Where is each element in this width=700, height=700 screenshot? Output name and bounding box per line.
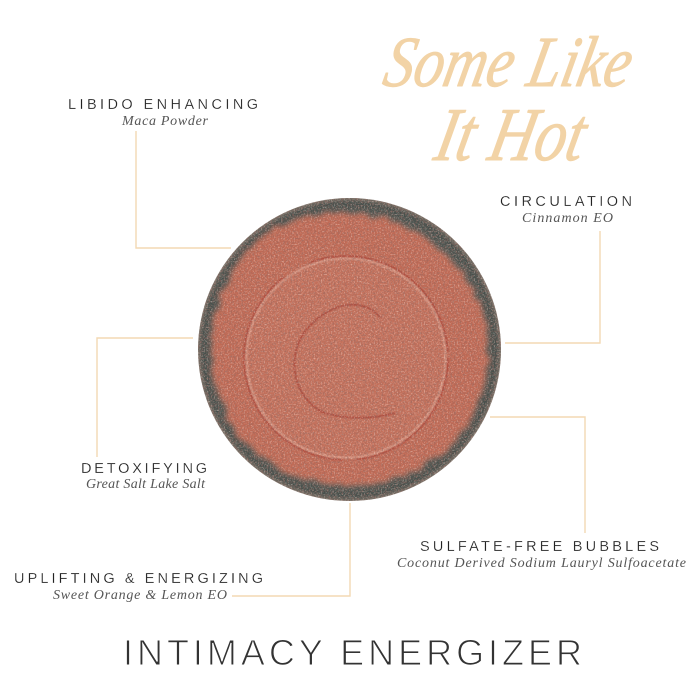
label: detoxifying: DETOXIFYING bbox=[81, 461, 207, 477]
label: detoxifying: Great Salt Lake Salt bbox=[86, 477, 206, 492]
title: Some Like It Hot: Some Like bbox=[378, 22, 641, 102]
connector: detoxifying bbox=[97, 338, 193, 457]
label: circulation bbox=[500, 194, 632, 226]
bath bomb salmon body bbox=[212, 213, 488, 486]
inner disc pale edge bbox=[246, 258, 446, 458]
title: Some Like It Hot: It Hot bbox=[428, 93, 596, 177]
inner disc outline bbox=[244, 256, 448, 460]
bath bomb grey rim bbox=[198, 198, 502, 502]
label: sulfate-free bubbles: Coconut Derived Sodium Lauryl Sulfoacetate bbox=[397, 556, 686, 571]
title: Some Like It Hot bbox=[378, 22, 641, 177]
label: sulfate-free bubbles: SULFATE-FREE BUBBLES bbox=[420, 539, 659, 555]
label: uplifting and energizing: Sweet Orange & Lemon EO bbox=[53, 588, 227, 603]
salt texture light bbox=[198, 198, 502, 502]
label: sulfate-free bubbles bbox=[397, 539, 686, 571]
label: libido enhancing bbox=[68, 97, 258, 129]
label: circulation: Cinnamon EO bbox=[522, 211, 613, 226]
bath bomb inner disc bbox=[245, 257, 447, 459]
footer heading: INTIMACY ENERGIZER bbox=[123, 632, 582, 673]
connector: uplifting and energizing bbox=[232, 503, 350, 596]
label: uplifting and energizing: UPLIFTING & ENERGIZING bbox=[14, 571, 263, 587]
label: uplifting and energizing bbox=[14, 571, 263, 603]
connector: circulation bbox=[505, 231, 600, 343]
label: detoxifying bbox=[81, 461, 207, 492]
connector: sulfate-free bubbles bbox=[490, 417, 585, 533]
label: libido enhancing: Maca Powder bbox=[121, 114, 209, 129]
photo: round bath bomb bbox=[198, 198, 502, 502]
salt texture dark bbox=[198, 198, 502, 502]
spiral imprint bbox=[294, 305, 395, 418]
label: circulation: CIRCULATION bbox=[500, 194, 632, 210]
label: libido enhancing: LIBIDO ENHANCING bbox=[68, 97, 258, 113]
connector: libido enhancing bbox=[136, 131, 231, 248]
